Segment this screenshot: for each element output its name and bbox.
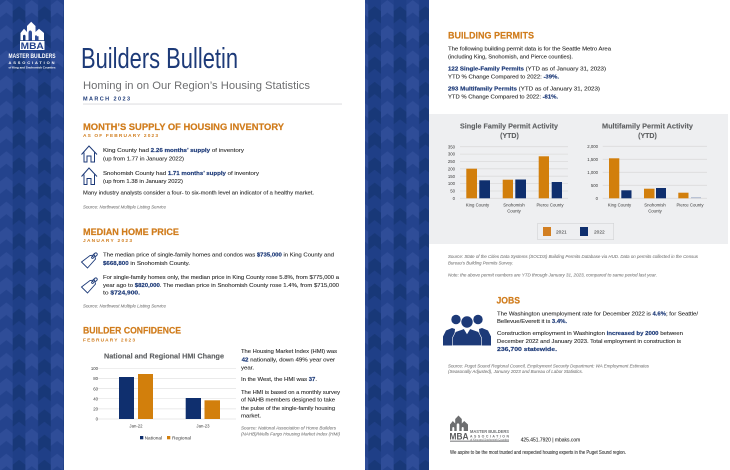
text: single-family permits — [448, 67, 606, 81]
source: HMI: Source: National Association of Home Builders — [241, 425, 337, 430]
panel: median home price — [82, 227, 339, 309]
source and note: permits: Source: State of the Cities Data Systems (SOCDS) Building Permits Database via HUD. Data on permits collected in the Census — [448, 254, 699, 259]
heading: jobs: JOBS — [496, 295, 520, 306]
heading: builder confidence: BUILDER CONFIDENCE — [83, 326, 181, 336]
text: single-family price: year ago to $820,000 . The median price in Snohomish County rose 1.4%, from $715,000 — [103, 283, 339, 289]
bar chart: single family permits: Pierce County — [536, 203, 564, 208]
source: jobs: (Seasonally Adjusted), January 2023 and Bureau of Labor Statistics. — [448, 369, 583, 374]
text: King County supply: King County had 2.26 months’ supply of inventory — [103, 148, 244, 154]
heading: median price: MEDIAN HOME PRICE — [83, 227, 179, 238]
text: permits intro — [448, 47, 611, 61]
text: HMI description: 42 nationally, down 49% year over — [242, 358, 335, 364]
text: King County supply — [103, 148, 244, 163]
panel: building permits text — [448, 31, 611, 101]
source: jobs: Source: Puget Sound Regional Council, Employment Security Department: WA Employment Estimates — [448, 364, 650, 369]
text: permits intro: The following building permit data is for the Seattle Metro Area — [448, 47, 611, 53]
bar chart: single family permits: Snohomish — [503, 203, 525, 208]
bar chart: HMI change: 0 — [96, 417, 99, 422]
source: median price: Source: Northwest Multiple Listing Service — [83, 304, 167, 309]
footer logo: grey MBA: ASSOCIATION — [470, 434, 509, 438]
bar chart: single family permits: 50 — [450, 189, 456, 194]
bar chart: multifamily permits — [587, 124, 707, 214]
chart legend — [140, 435, 191, 440]
logo: Master Builders Association (white) — [8, 22, 56, 70]
date: MARCH 2023 — [83, 96, 130, 102]
panel: permit charts — [429, 114, 728, 244]
text: unemployment: The Washington unemployment rate for December 2022 is 4.6%; for Seattle/ — [497, 312, 699, 318]
text: healthy market note: Many industry analysts consider a four- to six-month level an indicator of a healthy market. — [83, 191, 314, 197]
text: construction employment: Construction employment in Washington increased by 2000 between — [497, 331, 683, 337]
text: median price: $668,800 in Snohomish County. — [103, 261, 190, 267]
text: single-family price: to $724,900. — [103, 290, 141, 296]
text: multifamily permits: YTD % Change Compared to 2022: -81%. — [448, 95, 559, 101]
icon: price tag 1 — [82, 253, 97, 268]
bar chart: multifamily permits: County — [648, 209, 663, 214]
chart title: single family — [460, 124, 558, 140]
logo: Master Builders Association (white): ASSOCIATION — [8, 60, 55, 65]
icon: house Snohomish County — [82, 168, 97, 184]
text: single-family price — [103, 275, 339, 296]
chart legend: National — [145, 435, 162, 440]
footer contact: 425.451.7920 | mbaks.com — [521, 438, 580, 444]
text: unemployment: Bellevue/Everett it is 3.4%. — [497, 319, 568, 325]
chart title: single family: Single Family Permit Activity — [460, 124, 558, 131]
bar chart: single family permits: 100 — [448, 181, 456, 186]
heading: inventory: MONTH’S SUPPLY OF HOUSING INVENTORY — [83, 122, 285, 133]
text: single-family price: For single-family homes only, the median price in King County rose 5.8%, from $775,000 a — [103, 275, 339, 281]
panel: builder confidence — [83, 326, 341, 440]
chart title: multifamily: Multifamily Permit Activity — [602, 124, 693, 131]
text: multifamily permits: 293 Multifamily Permits (YTD as of January 31, 2023) — [448, 87, 600, 93]
text: Snohomish County supply: (up from 1.38 in January 2022) — [103, 179, 183, 185]
bar chart: HMI change: 80 — [93, 376, 99, 381]
bar chart: HMI change: Jan-23 — [196, 424, 210, 429]
text: median price: The median price of single-family homes and condos was $735,000 in King County and — [103, 252, 334, 258]
text: construction employment: 236,700 statewide. — [497, 347, 558, 353]
text: single-family permits: YTD % Change Compared to 2022: -39%. — [448, 75, 560, 81]
text: Snohomish County supply — [103, 171, 259, 185]
bar chart: multifamily permits: 1,500 — [587, 157, 599, 162]
source and note: permits — [448, 254, 699, 278]
text: HMI description: market. — [241, 413, 261, 419]
text: unemployment — [497, 312, 699, 325]
chart title: single family: (YTD) — [500, 133, 519, 140]
bar chart: single family permits: 300 — [448, 152, 456, 157]
bar chart: multifamily permits: Pierce County — [676, 203, 704, 208]
bar chart: multifamily permits: 500 — [591, 183, 599, 188]
bar chart: HMI change: 60 — [93, 386, 99, 391]
source: HMI — [241, 425, 341, 437]
logo: Master Builders Association (white): of King and Snohomish Counties — [8, 66, 56, 70]
bar chart: multifamily permits: 0 — [596, 196, 599, 201]
footer tagline: We aspire to be the most trusted and respected housing experts in the Puget Sound region. — [450, 450, 626, 456]
text: HMI description: the pulse of the single-family housing — [241, 406, 335, 412]
heading: building permits: BUILDING PERMITS — [448, 31, 534, 42]
text: HMI description — [241, 349, 340, 419]
panel: housing inventory — [82, 122, 314, 210]
logo: Master Builders Association (white): MBA — [21, 41, 44, 51]
text: King County supply: (up from 1.77 in January 2022) — [103, 157, 184, 163]
subheading: inventory date: AS OF FEBRUARY 2023 — [83, 133, 158, 139]
bar chart: single family permits — [448, 124, 568, 214]
bar chart: single family permits: 0 — [453, 196, 456, 201]
text: construction employment: December 2022 and January 2023. Total employment in construction is — [497, 339, 681, 345]
chart title: multifamily — [602, 124, 693, 140]
legend: 2021 and 2022: 2021 — [556, 230, 567, 236]
chart legend: Regional — [172, 435, 191, 440]
bar chart: single family permits: 250 — [448, 159, 456, 164]
icon: price tag 2 — [82, 278, 97, 293]
text: construction employment — [497, 331, 683, 353]
subtitle: Homing in on Our Region’s Housing Statistics — [83, 80, 310, 92]
bar chart: multifamily permits: 2,000 — [587, 144, 599, 149]
source: HMI: (NAHB)/Wells Fargo Housing Market Index (HMI) — [241, 432, 341, 437]
subheading: median price date: JANUARY 2023 — [83, 238, 132, 244]
bar chart: multifamily permits: 1,000 — [587, 170, 599, 175]
bar chart: multifamily permits: Snohomish — [644, 203, 666, 208]
text: HMI description: of NAHB members designed to take — [241, 398, 335, 404]
source: jobs — [448, 364, 650, 374]
bar chart: single family permits: 150 — [448, 174, 456, 179]
bar chart: single family permits: County — [507, 209, 522, 214]
chart title: multifamily: (YTD) — [638, 133, 657, 140]
bar chart: HMI change: 40 — [93, 396, 99, 401]
footer logo: grey MBA: MBA — [450, 432, 469, 442]
text: multifamily permits — [448, 87, 600, 101]
footer logo: grey MBA — [450, 416, 510, 442]
bar chart: single family permits: 200 — [448, 166, 456, 171]
text: single-family permits: 122 Single-Family Permits (YTD as of January 31, 2023) — [448, 67, 606, 73]
middle blue chevron band — [365, 0, 429, 470]
bar chart: HMI change: Jan-22 — [129, 424, 143, 429]
title: Builders Bulletin — [81, 43, 238, 75]
bar chart: HMI change: 20 — [93, 407, 99, 412]
bar chart: single family permits: 350 — [448, 144, 456, 149]
text: median price — [103, 252, 334, 267]
text: HMI description: In the West, the HMI was 37. — [241, 377, 317, 383]
bar chart: multifamily permits: King County — [608, 203, 632, 208]
bar chart: single family permits: King County — [466, 203, 490, 208]
text: permits intro: (including King, Snohomish, and Pierce counties). — [448, 55, 573, 61]
text: HMI description: The Housing Market Index (HMI) was — [241, 349, 337, 355]
footer logo: grey MBA: of King and Snohomish Counties — [470, 438, 510, 441]
text: Snohomish County supply: Snohomish County had 1.71 months’ supply of inventory — [103, 171, 259, 177]
source: inventory: Source: Northwest Multiple Listing Service — [83, 205, 167, 210]
source and note: permits: Note: the above permit numbers are YTD through January 31, 2023, compared to same period last year. — [448, 273, 657, 278]
legend: 2021 and 2022 — [538, 223, 614, 240]
text: HMI description: year. — [241, 365, 254, 371]
legend: 2021 and 2022: 2022 — [594, 230, 605, 236]
source and note: permits: Bureau’s Building Permits Survey. — [448, 261, 513, 266]
subheading: builder confidence date: FEBRUARY 2023 — [83, 338, 135, 344]
chart title: National and Regional HMI Change — [104, 354, 224, 361]
bar chart: HMI change — [91, 354, 236, 440]
panel: jobs — [443, 295, 699, 374]
text: HMI description: The HMI is based on a monthly survey — [241, 390, 340, 396]
icon: house King County — [82, 146, 97, 162]
bar chart: HMI change: 100 — [91, 366, 99, 371]
left blue chevron band — [0, 0, 64, 470]
icon: three people — [443, 315, 491, 346]
logo: Master Builders Association (white): MASTER BUILDERS — [8, 54, 56, 60]
footer logo: grey MBA: MASTER BUILDERS — [470, 429, 509, 434]
